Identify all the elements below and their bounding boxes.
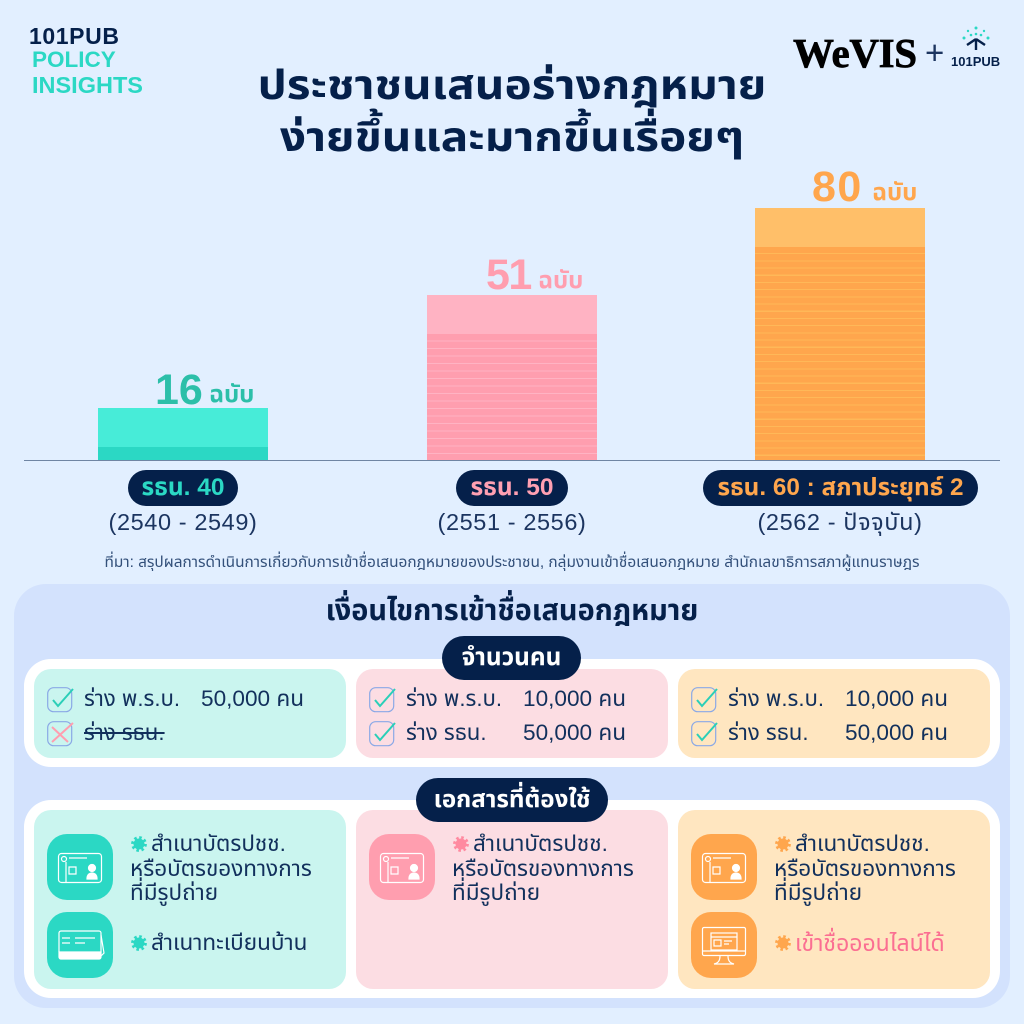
logo: 101PUB Policy Insights: INSIGHTS xyxy=(32,72,143,98)
period: 2540-2549: (2540 - 2549) xyxy=(109,509,257,535)
logo: WeVis + 101PUB: 101PUB xyxy=(951,54,1000,69)
text: draft act: ร่าง พ.ร.บ. xyxy=(728,686,824,711)
text: ID card copy: ที่มีรูปถ่าย xyxy=(452,880,540,905)
text: ID card copy xyxy=(130,831,312,906)
card: รธน. 60 people xyxy=(678,669,990,758)
value: 16 xyxy=(155,366,254,414)
text: no constitution draft: ร่าง รธน. xyxy=(84,720,165,745)
axis line xyxy=(24,460,1000,461)
label: required documents: เอกสารที่ต้องใช้ xyxy=(434,786,590,813)
label: รธน. 40: รธน. 40 xyxy=(141,474,225,501)
label: รธน. 40 xyxy=(128,470,238,506)
card: รธน. 40 documents xyxy=(34,810,346,989)
panel: number of people xyxy=(24,659,1000,767)
logo: 101PUB Policy Insights xyxy=(29,23,143,98)
logo: WeVis + 101PUB xyxy=(793,26,1000,76)
value: 80 xyxy=(812,163,917,211)
value: 51 xyxy=(486,251,583,299)
text: ID card copy: หรือบัตรของทางการ xyxy=(130,856,312,880)
text: ID card copy: หรือบัตรของทางการ xyxy=(774,856,956,880)
star bullet xyxy=(131,935,147,951)
number: 10,000: 10,000 คน xyxy=(523,686,626,711)
card: รธน. 40 people xyxy=(34,669,346,758)
star bullet xyxy=(775,836,791,852)
value: 80: 80 xyxy=(812,163,863,211)
star bullet xyxy=(453,836,469,852)
icon: ID card xyxy=(691,834,757,900)
icon: ID card xyxy=(369,834,435,900)
title xyxy=(258,62,766,160)
card: รธน. 50 people xyxy=(356,669,668,758)
title: ประชาชนเสนอร่างกฎหมาย xyxy=(258,62,766,108)
label: รธน. 60: รธน. 60 : สภาประยุทธ์ 2 xyxy=(718,474,963,501)
text: house registration copy: สำเนาทะเบียนบ้าน xyxy=(151,930,307,955)
text: constitution draft: ร่าง รธน. xyxy=(728,720,809,745)
logo: 101PUB Policy Insights: 101PUB xyxy=(29,23,120,49)
value: 80: ฉบับ xyxy=(872,179,917,206)
bar chart xyxy=(24,163,1000,536)
card: รธน. 60 documents xyxy=(678,810,990,989)
icon: house registration xyxy=(47,912,113,978)
label: รธน. 50: รธน. 50 xyxy=(470,474,554,501)
text: ID card copy: สำเนาบัตรปชช. xyxy=(473,831,608,856)
text: constitution draft: ร่าง รธน. xyxy=(406,720,487,745)
bar: 2551-2556 xyxy=(427,295,597,460)
value: 16: ฉบับ xyxy=(209,381,254,408)
text: ID card copy: สำเนาบัตรปชช. xyxy=(151,831,286,856)
label: รธน. 60 xyxy=(703,470,978,506)
text: draft act: ร่าง พ.ร.บ. xyxy=(406,686,502,711)
text: ID card copy xyxy=(452,831,634,906)
logo: WeVis + 101PUB: + xyxy=(925,34,944,71)
icon: check xyxy=(691,721,718,746)
icon: cross xyxy=(47,721,74,746)
icon: ID card xyxy=(47,834,113,900)
star bullet xyxy=(131,836,147,852)
title: ง่ายขึ้นและมากขึ้นเรื่อยๆ xyxy=(280,114,744,160)
source note: ที่มา: สรุปผลการดำเนินการเกี่ยวกับการเข้าชื่อเสนอกฎหมายของประชาชน, กลุ่มงานเข้าชื่อเสนอกฎหมาย สำนักเลขาธิการสภาผู้แทนราษฎร xyxy=(104,554,919,571)
star bullet xyxy=(775,935,791,951)
icon: computer xyxy=(691,912,757,978)
panel: conditions xyxy=(14,584,1010,1008)
value: 16: 16 xyxy=(155,366,203,414)
text: ID card copy: สำเนาบัตรปชช. xyxy=(795,831,930,856)
text: ID card copy xyxy=(774,831,956,906)
text: draft act: ร่าง พ.ร.บ. xyxy=(84,686,180,711)
card: รธน. 50 documents xyxy=(356,810,668,989)
label: number of people: จำนวนคน xyxy=(462,644,561,671)
number: 50,000: 50,000 คน xyxy=(201,686,304,711)
text: online signing: เข้าชื่อออนไลน์ได้ xyxy=(795,930,945,956)
logo: WeVis + 101PUB: WeVIS xyxy=(793,30,917,76)
period: 2562-present: (2562 - ปัจจุบัน) xyxy=(757,509,923,535)
logo: 101PUB Policy Insights: POLICY xyxy=(32,47,116,72)
number: 10,000: 10,000 คน xyxy=(845,686,948,711)
heading: conditions: เงื่อนไขการเข้าชื่อเสนอกฎหมาย xyxy=(326,595,698,627)
icon: check xyxy=(691,687,718,712)
label: รธน. 50 xyxy=(456,470,568,506)
text: ID card copy: ที่มีรูปถ่าย xyxy=(130,880,218,905)
period: 2551-2556: (2551 - 2556) xyxy=(438,509,586,535)
icon: check xyxy=(47,687,74,712)
icon: check xyxy=(369,687,396,712)
number: 50,000: 50,000 คน xyxy=(845,720,948,745)
bar: 2540-2549 xyxy=(98,408,268,460)
text: ID card copy: ที่มีรูปถ่าย xyxy=(774,880,862,905)
text: ID card copy: หรือบัตรของทางการ xyxy=(452,856,634,880)
panel: documents xyxy=(24,800,1000,998)
icon: check xyxy=(369,721,396,746)
value: 51: 51 xyxy=(486,251,531,299)
bar: 2562-present xyxy=(755,208,925,460)
label: required documents xyxy=(416,778,608,822)
number: 50,000: 50,000 คน xyxy=(523,720,626,745)
label: number of people xyxy=(442,636,581,680)
value: 51: ฉบับ xyxy=(538,267,583,294)
